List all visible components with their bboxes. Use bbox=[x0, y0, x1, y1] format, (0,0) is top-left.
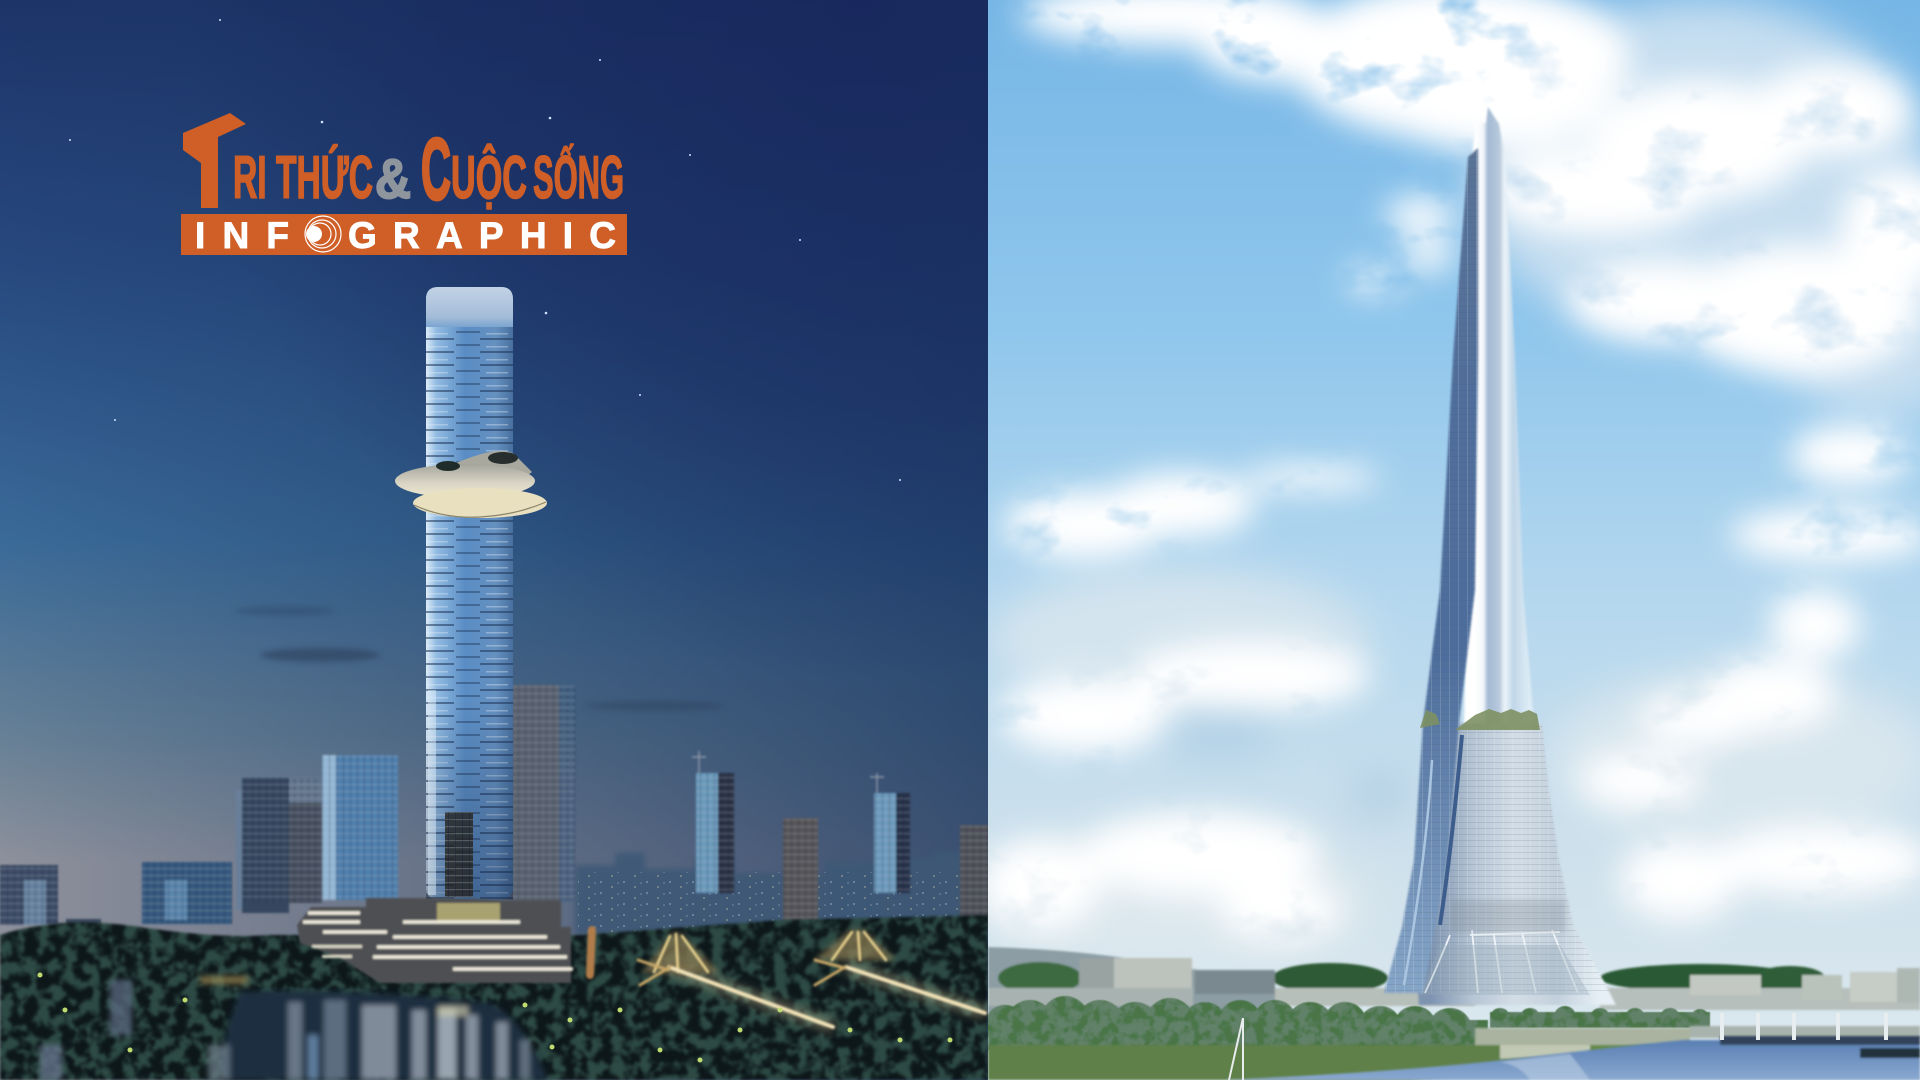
logo wordmark: SỐNG bbox=[533, 144, 624, 211]
podium terraces bbox=[297, 898, 573, 983]
sailboat mast bbox=[1229, 1018, 1243, 1080]
garden lamps bbox=[38, 972, 952, 1062]
bay water bbox=[1221, 1036, 1920, 1080]
logo T mark bbox=[183, 113, 246, 208]
spire core bbox=[1464, 107, 1534, 723]
main tower with disc bbox=[395, 287, 547, 900]
tower: left cluster bbox=[0, 865, 58, 925]
monorail pylons bbox=[1722, 1013, 1886, 1040]
bottom glass bbox=[1420, 945, 1590, 995]
logo wordmark bbox=[233, 121, 624, 218]
logo wordmark: & bbox=[375, 147, 411, 210]
tower shaft bbox=[426, 287, 513, 900]
logo: Tri Thức & Cuộc Sống bbox=[181, 113, 627, 256]
observation disc bbox=[395, 451, 547, 518]
band of shadow on base bbox=[1450, 900, 1566, 932]
logo wordmark: UỘC bbox=[451, 144, 527, 211]
tree line bbox=[985, 996, 1710, 1052]
riverside ground and trees bbox=[0, 915, 988, 1080]
textured clouds bbox=[980, 0, 1920, 940]
spire flared base bbox=[1418, 723, 1616, 1005]
lawn and shoreline bbox=[988, 1026, 1920, 1080]
background hills and low buildings bbox=[988, 947, 1920, 1020]
cloud haze mass bbox=[990, 0, 1920, 970]
logo infographic bar bbox=[181, 214, 627, 256]
sky garden planters bbox=[1420, 709, 1540, 730]
lit roads bbox=[590, 930, 985, 1027]
spire dark facet bbox=[1384, 148, 1478, 993]
base glazing arcs bbox=[1404, 735, 1578, 993]
logo infographic bar: GRAPHIC bbox=[348, 215, 616, 256]
icon: O ring mark bbox=[305, 216, 341, 252]
panel: daytime spire photo bbox=[980, 0, 1920, 1080]
panel: night city photo bbox=[0, 0, 990, 1080]
night sky bbox=[0, 0, 988, 1080]
distant lit skyline bbox=[575, 851, 988, 935]
logo wordmark: C bbox=[421, 121, 451, 218]
logo infographic bar: INF bbox=[195, 215, 289, 256]
spire tower bbox=[1384, 107, 1616, 1005]
river with reflections bbox=[40, 976, 548, 1080]
logo wordmark: RI THỨC bbox=[233, 144, 373, 211]
background towers bbox=[0, 685, 990, 953]
day sky with clouds bbox=[980, 0, 1920, 1080]
river basin bbox=[223, 991, 548, 1080]
